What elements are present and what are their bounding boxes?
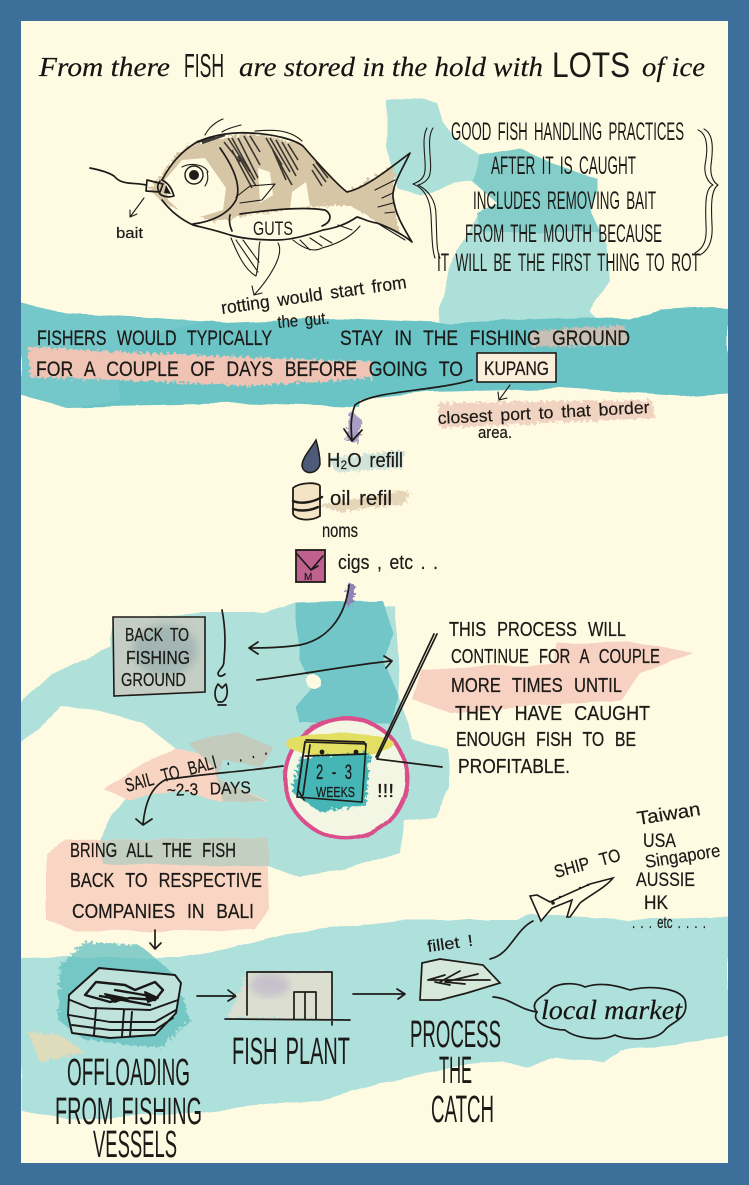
offloading label: FROM FISHING bbox=[55, 1091, 202, 1133]
title: LOTS bbox=[552, 46, 630, 85]
fillet: fillet ! bbox=[426, 933, 474, 956]
title: FISH bbox=[184, 47, 224, 84]
port note bbox=[437, 398, 650, 442]
text: PROCESS bbox=[410, 1014, 501, 1056]
icon: hook and fish bbox=[215, 610, 227, 705]
supplies list bbox=[293, 440, 438, 583]
destinations: . . . etc . . . . bbox=[632, 913, 706, 932]
back to fishing ground box: BACK TO bbox=[125, 625, 189, 645]
kupang box bbox=[477, 353, 556, 382]
fish face and belly bbox=[165, 158, 370, 230]
icon: water drop bbox=[302, 440, 320, 473]
sail to bali: SAIL TO BALI . . . . bbox=[123, 739, 269, 797]
process note: MORE TIMES UNTIL bbox=[451, 675, 622, 697]
crate wash bbox=[58, 942, 190, 1048]
process note: ENOUGH FISH TO BE bbox=[456, 729, 636, 751]
destinations: Singapore bbox=[643, 840, 722, 872]
arrow: return from port bbox=[249, 582, 356, 654]
process the catch label: CATCH bbox=[431, 1089, 494, 1131]
fish handling note bbox=[413, 118, 718, 277]
offloading label bbox=[55, 1052, 202, 1166]
yellow wash bbox=[286, 732, 394, 756]
fins bbox=[205, 119, 405, 276]
fish illustration bbox=[90, 119, 412, 332]
calendar bbox=[297, 740, 366, 802]
kupang box: KUPANG bbox=[484, 359, 549, 380]
sail to bali bbox=[123, 739, 269, 800]
back to fishing ground box: GROUND bbox=[121, 670, 186, 690]
fishers text: FISHERS WOULD TYPICALLY bbox=[37, 327, 272, 350]
ship to: SHIP TO bbox=[552, 845, 623, 882]
local market cloud: local market bbox=[541, 995, 684, 1025]
mouth and bait bbox=[90, 168, 174, 197]
process the catch label: THE bbox=[439, 1050, 472, 1092]
exclamation marks: !!! bbox=[377, 781, 394, 801]
title: of ice bbox=[642, 52, 705, 82]
H2O refill: H₂O refill bbox=[327, 450, 403, 472]
port note: area. bbox=[478, 423, 512, 442]
curve to plane bbox=[490, 921, 533, 959]
icon: cigarette pack: M bbox=[304, 572, 312, 583]
left brace bbox=[413, 128, 440, 258]
bring fish text: COMPANIES IN BALI bbox=[72, 901, 254, 923]
title: are stored in the hold with bbox=[239, 52, 543, 82]
arrow: to offloading bbox=[150, 930, 161, 949]
fishers text: STAY IN THE FISHING GROUND bbox=[340, 327, 630, 350]
note text bbox=[437, 118, 700, 277]
fishers text: FOR A COUPLE OF DAYS BEFORE GOING TO bbox=[36, 358, 463, 381]
oil refill: oil refil bbox=[330, 488, 392, 510]
label: rotting note: the gut. bbox=[277, 309, 330, 332]
fishers text bbox=[36, 327, 630, 381]
process note: CONTINUE FOR A COUPLE bbox=[451, 646, 660, 668]
fish wash bbox=[150, 133, 400, 235]
icon: cigarette pack bbox=[296, 550, 325, 583]
calendar: WEEKS bbox=[316, 784, 355, 801]
process the catch label bbox=[410, 1014, 501, 1131]
destinations: Taiwan bbox=[635, 799, 702, 830]
fish plant bbox=[225, 972, 350, 1025]
bring fish text: BRING ALL THE FISH bbox=[70, 840, 236, 862]
label: bait bbox=[116, 198, 144, 242]
title bbox=[38, 46, 705, 85]
process note: PROFITABLE. bbox=[458, 756, 570, 778]
title: From there bbox=[38, 52, 170, 82]
plane bbox=[530, 878, 613, 921]
supply washes bbox=[330, 450, 405, 472]
arrow: sail bbox=[136, 766, 283, 825]
arrow: offloading to plant bbox=[197, 990, 236, 1001]
back to fishing ground box: FISHING bbox=[126, 648, 190, 668]
big pointer arrow bbox=[376, 634, 442, 767]
fish plant label: FISH PLANT bbox=[232, 1031, 350, 1073]
icon: oil barrel bbox=[293, 483, 322, 520]
process note bbox=[449, 619, 660, 778]
arrow: to next trip bbox=[257, 656, 392, 680]
fish outline bbox=[162, 133, 412, 242]
noms: noms bbox=[322, 521, 358, 542]
fillet bbox=[420, 933, 500, 1000]
destinations: HK bbox=[644, 893, 668, 914]
cigs etc: cigs , etc . . bbox=[338, 552, 438, 574]
offloading label: VESSELS bbox=[93, 1124, 177, 1166]
pink ring bbox=[285, 718, 407, 838]
back to fishing ground box bbox=[113, 617, 205, 696]
kupang arrow bbox=[344, 380, 472, 442]
label: guts: GUTS bbox=[253, 219, 293, 240]
right brace bbox=[695, 129, 718, 255]
label: rotting note bbox=[220, 243, 408, 332]
calendar: 2 - 3 bbox=[316, 761, 352, 784]
label: bait: bait bbox=[116, 225, 144, 242]
fish stripes bbox=[197, 135, 328, 188]
destinations: USA bbox=[643, 831, 676, 852]
label: rotting note: rotting would start from bbox=[220, 272, 408, 318]
bring fish text bbox=[70, 840, 262, 923]
local market cloud bbox=[493, 984, 686, 1039]
offloading crate bbox=[28, 942, 190, 1062]
sail to bali: ~2-3 DAYS bbox=[166, 778, 251, 800]
arrow: plant to process bbox=[353, 989, 405, 999]
port note: closest port to that border bbox=[437, 398, 650, 428]
calendar with pink ring bbox=[285, 718, 407, 838]
crate bbox=[68, 968, 181, 1038]
gill and gut sac bbox=[193, 148, 330, 231]
destinations bbox=[632, 799, 722, 932]
process note: THIS PROCESS WILL bbox=[449, 619, 626, 641]
teal wash bbox=[292, 752, 370, 812]
arrow: kupang to port note bbox=[498, 385, 510, 400]
bring fish text: BACK TO RESPECTIVE bbox=[70, 870, 262, 892]
offloading label: OFFLOADING bbox=[67, 1052, 190, 1094]
process note: THEY HAVE CAUGHT bbox=[455, 703, 650, 725]
fish eye bbox=[182, 165, 208, 186]
destinations: AUSSIE bbox=[636, 870, 695, 891]
